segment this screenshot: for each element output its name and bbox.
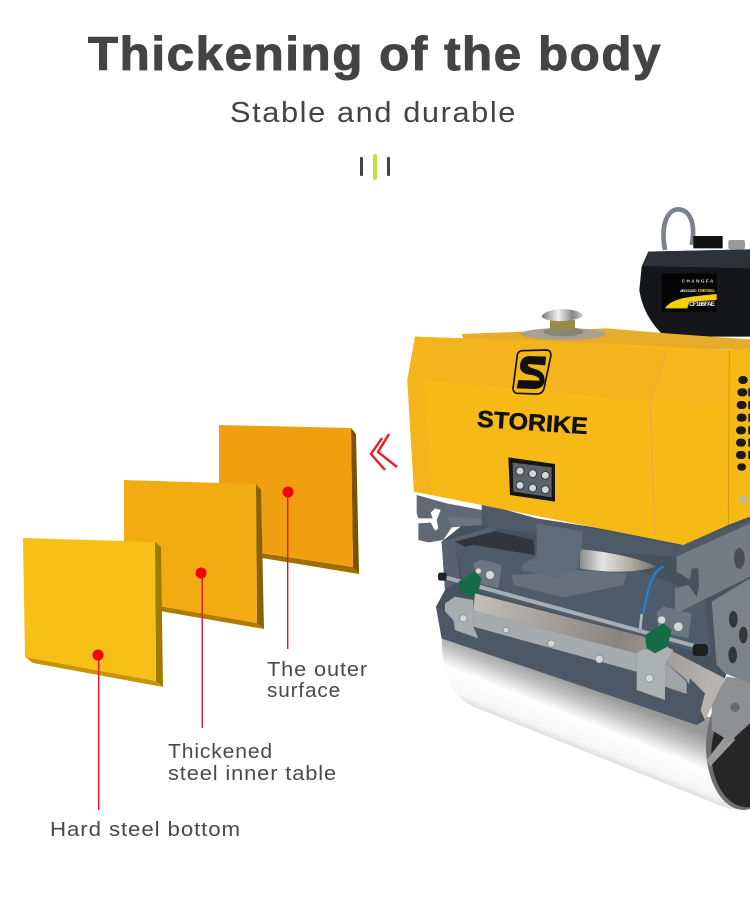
nozzle fitting (640, 614, 642, 632)
label: the outer surface: The outer (267, 659, 368, 681)
green clamp right (645, 623, 672, 653)
vent slots (736, 376, 750, 471)
pipe cap right (693, 644, 708, 656)
corner facet (650, 350, 728, 404)
roller machine: lower chassis and drum (417, 495, 750, 810)
right lower plate (712, 578, 750, 683)
base plate (512, 570, 627, 597)
engine cap (693, 236, 723, 248)
right bracket (637, 647, 673, 700)
mount bolts (476, 568, 683, 631)
galvanized scraper bar (473, 611, 637, 672)
leader: outer surface (282, 486, 294, 649)
blue hose (643, 567, 663, 613)
right lower plate edge (705, 600, 718, 667)
centre tab (522, 523, 583, 578)
fuel filler (521, 309, 606, 340)
engine decal: CF186FAE (689, 301, 715, 308)
engine decal: CHANGFA (682, 279, 714, 284)
lower plate holes (728, 611, 748, 663)
plate: inner table (124, 480, 264, 629)
plate: outer surface (219, 425, 359, 574)
logo (513, 350, 551, 394)
title: Thickening of the body (88, 27, 662, 80)
engine housing (639, 249, 750, 337)
arrow: red double chevron (371, 434, 397, 470)
upper plate hole (734, 548, 745, 569)
work light (508, 457, 555, 502)
left mount block (473, 559, 502, 588)
engine decal: DIESEL (698, 288, 715, 294)
housing top face (642, 249, 750, 268)
engine decal (662, 273, 717, 312)
leader: inner table (196, 568, 206, 728)
left hook bracket (417, 495, 482, 542)
yellow hood (407, 337, 750, 545)
tank top (462, 328, 750, 350)
right upper plate (675, 523, 750, 612)
silver slew disc (580, 549, 656, 572)
side panel seam (727, 350, 731, 525)
green clamp left (458, 572, 482, 597)
label: the outer surface: surface (267, 680, 341, 702)
subtitle: Stable and durable (230, 97, 517, 129)
gray band of drum above scraper (473, 593, 725, 720)
panel bolt (740, 496, 747, 503)
scraper plate (436, 607, 705, 725)
bar bolts (460, 615, 653, 682)
chassis inner body (455, 532, 710, 657)
drum end opening (706, 677, 750, 810)
divider marks (360, 154, 390, 180)
under body strip (482, 503, 750, 557)
chassis backing (436, 510, 750, 725)
pipe cap left (438, 573, 447, 581)
label: thickened steel inner table: Thickened (168, 741, 273, 763)
bolt top (728, 240, 745, 249)
crease highlight (650, 351, 667, 535)
lifting handle (664, 209, 693, 250)
plate: hard steel bottom (23, 538, 163, 687)
label: thickened steel inner table: steel inner table (168, 763, 337, 785)
upper hood facet (425, 337, 667, 402)
engine decal: AIR-COOLED (680, 289, 697, 293)
left corner facet (407, 337, 433, 493)
bar extension (665, 662, 687, 694)
brand name: STORIKE (476, 406, 588, 439)
dark recess (455, 530, 535, 555)
hook mount (447, 517, 482, 526)
leader: hard steel bottom (92, 650, 104, 810)
left side box (442, 527, 497, 590)
spray pipe (445, 577, 695, 646)
drum body (442, 637, 750, 809)
right mount block (657, 607, 692, 638)
label: hard steel bottom: Hard steel bottom (50, 819, 241, 841)
left bracket (445, 597, 478, 638)
roller machine: engine (407, 209, 750, 545)
